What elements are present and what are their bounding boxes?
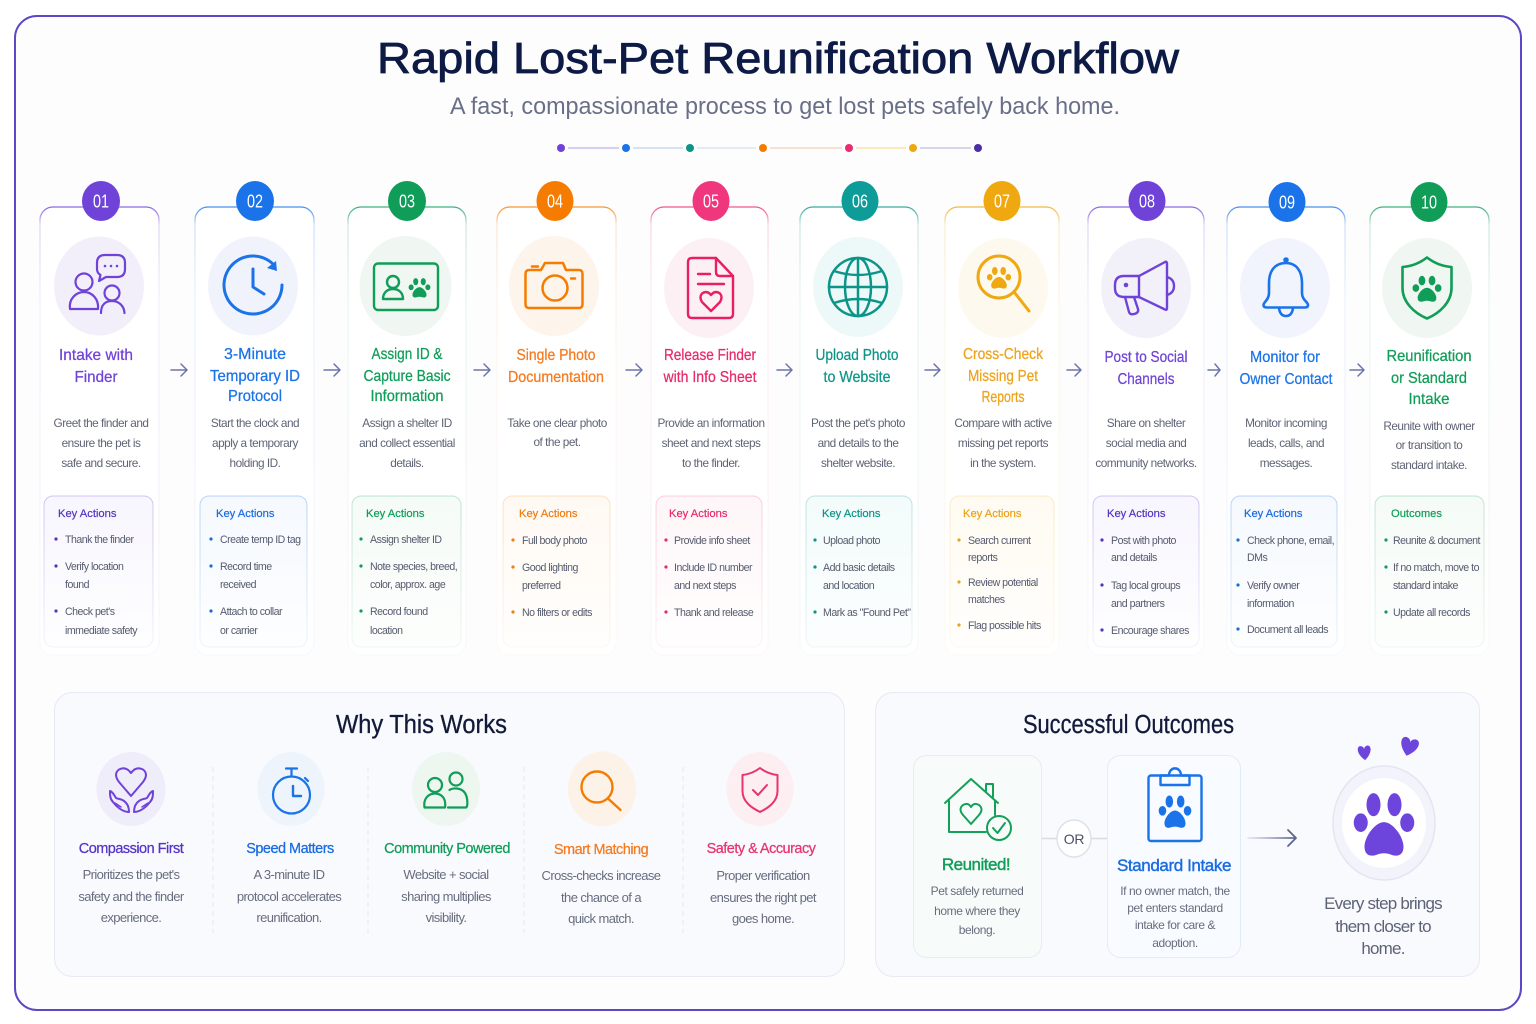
icon: two people [412,752,480,826]
icon: finder and person talking [54,236,144,336]
number badge: 10 [1421,192,1437,212]
key actions box: information [1247,598,1295,610]
card text: pet enters standard [1127,901,1223,915]
key actions box: Post with photo [1111,535,1177,547]
key actions box: Check phone, email, [1247,535,1334,547]
description: standard intake. [1391,458,1467,472]
connector with OR: OR [1064,831,1084,847]
key actions box: Search current [968,535,1031,547]
number badge [984,181,1020,221]
key actions box: Verify location [65,561,124,573]
step title: or Standard [1391,370,1467,387]
key actions box: Provide info sheet [674,535,750,547]
description: Provide an information [657,416,765,430]
step title: 3-Minute [224,346,286,363]
title: Rapid Lost-Pet Reunification Workflow [377,34,1179,83]
item title: Speed Matters [246,841,334,857]
number badge: 05 [703,192,719,212]
key actions box: Note species, breed, [370,561,457,573]
card outline [1227,207,1345,655]
number badge: 09 [1279,192,1295,212]
step title [1386,348,1472,408]
item title: Compassion First [79,841,184,857]
item text [710,868,817,926]
step 09 [1227,182,1345,655]
key actions box: Check pet's [65,606,115,618]
key actions box: location [370,625,403,637]
number badge [692,181,730,221]
key actions box: Encourage shares [1111,625,1189,637]
card title: Standard Intake [1117,856,1231,875]
description: social media and [1106,436,1186,450]
description: Start the clock and [211,416,299,430]
closing message: home. [1361,939,1405,958]
key actions box: Record found [370,606,428,618]
icon: shield with check [726,752,794,826]
description: leads, calls, and [1248,436,1324,450]
key actions box [1231,496,1337,647]
description [954,416,1053,470]
outcomes box: Update all records [1393,607,1470,619]
heading: Why This Works [336,711,507,739]
step title [1104,349,1188,388]
item text: reunification. [256,910,322,925]
card text: adoption. [1152,936,1198,950]
card outline [945,207,1059,655]
key actions box: Include ID number [674,562,753,574]
step title: Cross-Check [963,346,1044,363]
key actions box [806,496,912,647]
card outline [1370,207,1489,655]
key actions box: Key Actions [1244,508,1303,520]
card: standard intake [1108,756,1240,958]
item text: Cross-checks increase [542,868,661,883]
closing message: them closer to [1335,917,1431,936]
key actions box [656,496,762,647]
icon: house with heart and check [945,779,1011,840]
step title [364,346,450,405]
outcomes box: standard intake [1393,580,1459,592]
item text: visibility. [426,910,466,925]
icon: stopwatch [258,752,324,826]
description: community networks. [1095,456,1197,470]
key actions box: Review potential [968,577,1038,589]
step title: Protocol [228,388,282,405]
arrow [1208,364,1220,376]
number badge [388,181,426,221]
panel: why this works [54,692,844,976]
key actions box: matches [968,594,1005,606]
key actions box: Mark as "Found Pet" [823,607,911,619]
step title [508,347,604,386]
heading: Successful Outcomes [1023,711,1234,739]
key actions box: Key Actions [58,508,117,520]
step title: Capture Basic [364,368,450,385]
description: Monitor incoming [1245,416,1327,430]
step title: Release Finder [664,347,757,364]
item text [542,868,661,926]
key actions box: No filters or edits [522,607,592,619]
item text: safety and the finder [78,889,185,904]
step 02 [195,181,314,655]
outcomes box [1375,496,1484,647]
number badge [82,181,120,221]
icon: magnifier with paw [958,238,1048,338]
hearts [1357,736,1420,761]
arrow [1067,364,1081,376]
card outline [1088,207,1204,655]
step title: Documentation [508,369,604,386]
step title: Post to Social [1104,349,1188,366]
icon: megaphone [1101,238,1191,338]
arrow [925,364,940,376]
step title [1240,349,1333,388]
card text: If no owner match, the [1120,884,1230,898]
step title: Reunification [1386,348,1472,365]
key actions box: preferred [522,580,561,592]
description: Post the pet's photo [811,416,906,430]
number badge: 08 [1139,192,1155,212]
number badge [236,181,274,221]
key actions box: and details [1111,552,1157,564]
key actions box: Key Actions [1107,508,1166,520]
item text: goes home. [732,911,794,926]
description: Share on shelter [1107,416,1186,430]
closing message [1324,894,1442,958]
key actions box: Assign shelter ID [370,534,442,546]
card text: intake for care & [1135,918,1216,932]
icon: ID card with paw [360,236,452,336]
item text: ensures the right pet [710,890,817,905]
number badge: 03 [399,192,415,212]
description: safe and secure. [61,456,141,470]
step title: Intake with [59,347,133,364]
icon: magnifier [568,752,636,826]
arrow to paw [1248,830,1296,846]
icon: clipboard with paw [1148,768,1202,841]
card outline [40,207,159,655]
subtitle: A fast, compassionate process to get lost pets safely back home. [450,93,1120,120]
description [1245,416,1327,470]
key actions box: found [65,579,90,591]
step title: Channels [1118,371,1174,388]
card outline [800,207,918,655]
step title: to Website [824,369,891,386]
key actions box: and location [823,580,875,592]
card outline [195,207,314,655]
step title [59,347,133,386]
key actions box [352,496,461,647]
key actions box: Add basic details [823,562,895,574]
closing message: Every step brings [1324,894,1442,913]
step 04 [497,181,616,655]
key actions box [950,496,1054,647]
item text: Website + social [403,867,489,882]
key actions box: Upload photo [823,535,881,547]
step title: Temporary ID [210,368,300,385]
card outline [651,207,768,655]
step title: Finder [74,369,118,386]
description: Take one clear photo [507,416,608,430]
key actions box: or carrier [220,625,258,637]
card text: belong. [959,923,995,937]
item title: Community Powered [384,841,510,857]
description: to the finder. [682,456,740,470]
key actions box [503,496,610,647]
key actions box: Key Actions [963,508,1022,520]
description [1095,416,1197,470]
key actions box: Key Actions [669,508,728,520]
item text: quick match. [568,911,634,926]
description: and details to the [818,436,899,450]
item: compassion first [78,752,185,925]
key actions box: Document all leads [1247,624,1328,636]
key actions box: Thank the finder [65,534,135,546]
description [811,416,906,470]
key actions box: immediate safety [65,625,138,637]
step 08 [1088,181,1204,655]
outcomes box: Reunite & document [1393,535,1481,547]
outcomes box: If no match, move to [1393,562,1480,574]
key actions box: Key Actions [366,508,425,520]
number badge [1128,181,1166,221]
description: shelter website. [821,456,895,470]
key actions box: reports [968,552,998,564]
step title: Upload Photo [816,347,899,364]
key actions box: received [220,579,257,591]
card text: Pet safely returned [931,884,1023,898]
key actions box: Create temp ID tag [220,534,301,546]
item title: Smart Matching [554,842,649,858]
key actions box [44,496,153,647]
icon: heart in hands [96,752,166,826]
item text: Proper verification [716,868,810,883]
arrow [324,364,340,376]
key actions box: Key Actions [519,508,578,520]
icon: globe [813,237,903,337]
key actions box: Good lighting [522,562,579,574]
step title: Monitor for [1250,349,1321,366]
paw medallion [1333,766,1435,880]
key actions box: DMs [1247,552,1267,564]
step title: Intake [1408,391,1450,408]
card text [1120,884,1230,950]
key actions box: Flag possible hits [968,620,1041,632]
icon: shield with paw [1382,238,1472,338]
item text: Prioritizes the pet's [83,867,181,882]
key actions box: Key Actions [822,508,881,520]
step title: Reports [982,389,1024,406]
step 01 [40,181,159,655]
step title [816,347,899,386]
step 07 [945,181,1059,655]
item text [78,867,185,925]
item text: A 3-minute ID [254,867,325,882]
description: of the pet. [534,435,581,449]
item title: Safety & Accuracy [707,841,817,857]
icon: camera [509,236,599,336]
step title [963,346,1044,406]
description: and collect essential [359,436,455,450]
step title: with Info Sheet [663,369,757,386]
key actions box [1093,496,1199,647]
description [54,416,148,470]
item: speed matters [237,752,342,925]
step title: Information [370,388,444,405]
outcomes box: Outcomes [1391,508,1442,520]
card outline [497,207,616,655]
item text: the chance of a [561,890,642,905]
description: apply a temporary [212,436,299,450]
icon: bell [1240,238,1330,338]
description: or transition to [1396,438,1463,452]
icon: clock [208,236,298,336]
item text [401,867,492,925]
description: Assign a shelter ID [362,416,452,430]
item: safety and accuracy [707,752,817,926]
step 05 [651,181,768,655]
connector with OR [1042,820,1107,857]
step 03 [348,181,466,655]
description: Greet the finder and [54,416,148,430]
description [1383,419,1475,472]
card: reunited [914,756,1042,958]
step title [663,347,757,386]
step title: Assign ID & [372,346,443,363]
number badge [842,181,878,221]
description: ensure the pet is [62,436,141,450]
step title [210,346,300,405]
key actions box: Attach to collar [220,606,283,618]
panel: successful outcomes [876,692,1480,976]
description: details. [390,456,424,470]
key actions box: Full body photo [522,535,588,547]
key actions box: Verify owner [1247,580,1300,592]
number badge: 01 [93,192,109,212]
card outline [348,207,466,655]
description: messages. [1260,456,1312,470]
item text [237,867,342,925]
arrow [474,364,490,376]
description [657,416,765,470]
card title: Reunited! [942,855,1010,874]
number badge: 02 [247,192,263,212]
number badge: 06 [852,192,868,212]
step title: Owner Contact [1240,371,1333,388]
step 10 [1370,182,1489,655]
step 06 [800,181,918,655]
icon: document with heart [664,238,754,338]
description [211,416,299,470]
key actions box [200,496,307,647]
item: community powered [384,752,510,925]
item: smart matching [542,752,661,926]
description: sheet and next steps [662,436,761,450]
number badge [536,181,574,221]
description: in the system. [970,456,1036,470]
key actions box: color, approx. age [370,579,446,591]
number badge [1268,182,1306,222]
step title: Single Photo [516,347,596,364]
description: missing pet reports [958,436,1049,450]
key actions box: Record time [220,561,272,573]
item text: sharing multiplies [401,889,492,904]
divider dots [557,144,982,152]
key actions box: and next steps [674,580,736,592]
arrow [777,364,792,376]
card text: home where they [934,904,1020,918]
description [359,416,455,470]
description: Compare with active [954,416,1053,430]
step title: Missing Pet [968,368,1038,385]
key actions box: Thank and release [674,607,754,619]
arrow [626,364,642,376]
key actions box: and partners [1111,598,1165,610]
description: holding ID. [230,456,281,470]
arrow [1350,364,1364,376]
number badge: 04 [547,192,563,212]
description: Reunite with owner [1383,419,1475,433]
item text: protocol accelerates [237,889,342,904]
card text [931,884,1023,937]
item text: experience. [101,910,161,925]
number badge [1410,182,1448,222]
number badge: 07 [994,192,1010,212]
key actions box: Tag local groups [1111,580,1180,592]
key actions box: Key Actions [216,508,275,520]
description [507,416,608,449]
arrow [171,364,187,376]
